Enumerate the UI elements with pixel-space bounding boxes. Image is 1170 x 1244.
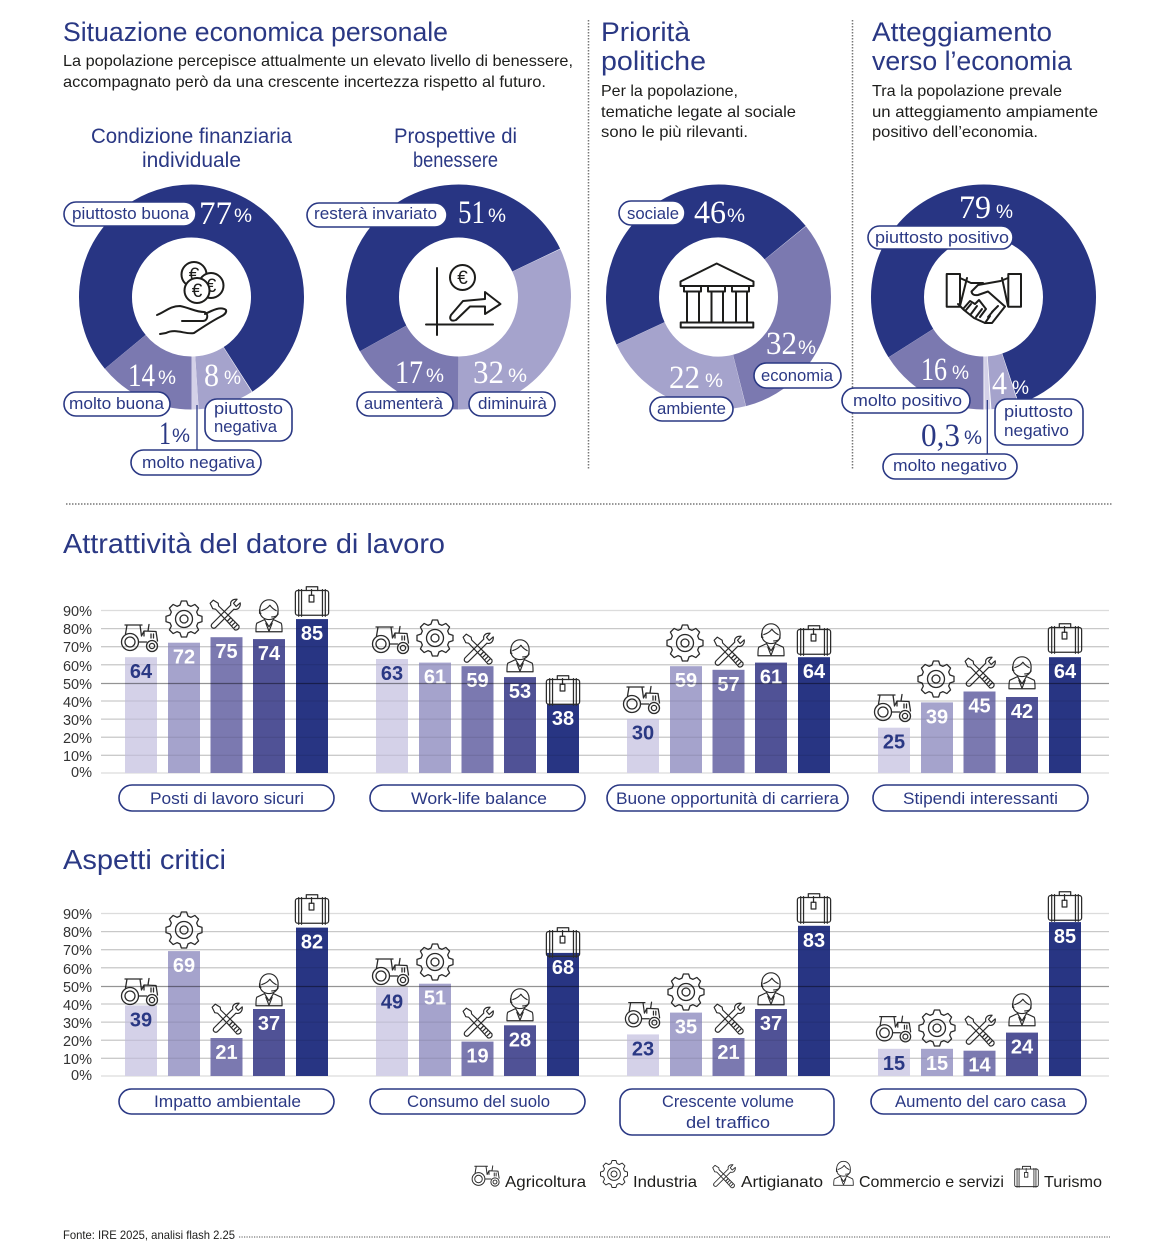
percent: 32	[766, 326, 816, 362]
percent: 17: %	[426, 366, 444, 387]
axis labels: 80%	[63, 925, 92, 941]
axis labels: 30%	[63, 713, 92, 729]
label: Consumo del suolo	[370, 1089, 585, 1114]
percent: 22: %	[705, 371, 723, 392]
bar: Industria 69: 69	[173, 955, 195, 977]
bar: Turismo 64	[1048, 624, 1082, 773]
legend item: Agricoltura	[472, 1166, 586, 1191]
axis labels	[63, 907, 92, 1084]
bar: Artigianato 59	[462, 633, 494, 773]
bar: Commercio e servizi 37	[755, 973, 787, 1076]
label: Impatto ambientale	[119, 1089, 334, 1114]
group: Buone opportunità di carriera	[624, 624, 831, 773]
bar: Commercio e servizi 61	[755, 624, 787, 773]
bar: Agricoltura 49: 49	[381, 991, 403, 1013]
bar: Turismo 82: 82	[301, 932, 323, 954]
text block: atteggiamento: un atteggiamento ampiamente	[872, 104, 1098, 121]
label: molto buona: molto buona	[69, 394, 165, 413]
legend item: Artigianato	[713, 1165, 823, 1191]
bar: Turismo 85	[1048, 892, 1082, 1076]
heading: Prospettive di benessere: benessere	[413, 148, 498, 172]
bar: Agricoltura 63: 63	[381, 663, 403, 685]
percent: 46: %	[727, 206, 745, 227]
label: Posti di lavoro sicuri: Posti di lavoro sicuri	[150, 789, 304, 808]
bar: Agricoltura 39: 39	[130, 1009, 152, 1031]
bar: Turismo 83	[797, 894, 831, 1076]
bar chart: Aspetti critici	[63, 892, 1109, 1135]
percent: 32: %	[508, 366, 527, 387]
text block: priorità: tematiche legate al sociale	[601, 104, 796, 121]
bar: Artigianato 14	[964, 1015, 996, 1077]
heading: Condizione finanziaria individuale: individuale	[142, 148, 241, 172]
bar: Commercio e servizi 24	[1006, 994, 1038, 1076]
label: ambiente: ambiente	[657, 399, 726, 418]
percent: 17: 17	[395, 355, 423, 391]
bar: Industria 39	[918, 661, 954, 773]
legend item: Turismo: Turismo	[1044, 1174, 1102, 1191]
percent: 4: %	[1012, 378, 1029, 399]
percent: 32: %	[798, 338, 816, 359]
label: Stipendi interessanti: Stipendi interessanti	[903, 789, 1058, 808]
percent: 8: 8	[204, 358, 219, 394]
bar: Industria 51: 51	[424, 988, 446, 1010]
bar: Commercio e servizi 74: 74	[258, 643, 281, 665]
percent: 46: 46	[694, 195, 726, 231]
percent: 79: %	[996, 202, 1013, 223]
percent: 22	[669, 360, 723, 396]
heading: Atteggiamento verso l'economia	[872, 17, 1073, 76]
percent: 51: 51	[458, 195, 485, 231]
bar: Artigianato 45: 45	[968, 696, 991, 718]
icon: hand with euro coins	[157, 262, 226, 334]
label: Aumento del caro casa: Aumento del caro casa	[895, 1092, 1067, 1111]
bar: Artigianato 21: 21	[215, 1042, 238, 1064]
percent: 1	[159, 416, 190, 452]
donut chart: Priorità politiche	[598, 176, 841, 421]
label: aumenterà: aumenterà	[364, 394, 444, 413]
heading: Atteggiamento verso l'economia: verso l’economia	[872, 46, 1073, 76]
bar: Commercio e servizi 74	[253, 600, 285, 773]
percent: 77: 77	[199, 196, 232, 232]
label: resterà invariato	[307, 203, 447, 227]
axis labels: 60%	[63, 962, 92, 978]
text block: atteggiamento	[872, 83, 1098, 141]
axis labels: 60%	[63, 659, 92, 675]
axis labels: 40%	[63, 998, 92, 1014]
axis labels: 20%	[63, 1034, 92, 1050]
bar: Commercio e servizi 37: 37	[760, 1013, 782, 1035]
legend item: Industria: Industria	[633, 1174, 697, 1191]
heading: Priorità politiche: Priorità	[601, 17, 691, 47]
percent: 1: %	[172, 426, 190, 447]
bar: Agricoltura 64	[122, 624, 158, 773]
bar: Artigianato 21: 21	[717, 1042, 740, 1064]
axis labels: 10%	[63, 1052, 92, 1068]
bar: Commercio e servizi 42: 42	[1011, 701, 1033, 723]
bar: Industria 59: 59	[675, 670, 697, 692]
label: Impatto ambientale: Impatto ambientale	[154, 1092, 301, 1111]
text block: intro benessere: La popolazione percepisce attualmente un elevato livello di benessere,	[63, 53, 573, 70]
label: resterà invariato: resterà invariato	[314, 204, 437, 223]
bar: Agricoltura 23	[625, 1002, 660, 1076]
percent: 1: 1	[159, 416, 171, 452]
donut chart: Prospettive di benessere	[307, 180, 575, 416]
label: Aumento del caro casa	[871, 1089, 1086, 1114]
text block: atteggiamento: positivo dell’economia.	[872, 124, 1038, 141]
heading: Atteggiamento verso l'economia: Atteggiamento	[872, 17, 1052, 47]
bar: Agricoltura 23: 23	[632, 1038, 654, 1060]
label: ambiente	[650, 397, 733, 421]
bar: Artigianato 19: 19	[466, 1046, 489, 1068]
label: molto positivo: molto positivo	[853, 391, 962, 410]
legend item: Artigianato: Artigianato	[741, 1174, 823, 1191]
axis labels: 10%	[63, 749, 92, 765]
heading: Prospettive di benessere: Prospettive di	[394, 124, 517, 148]
axis labels: 0%	[71, 765, 92, 781]
bar: Turismo 85: 85	[1054, 926, 1076, 948]
percent: 22: 22	[669, 360, 700, 396]
title: Aspetti critici: Aspetti critici	[63, 844, 226, 875]
bar: Agricoltura 63	[372, 626, 408, 773]
icon: hand with euro coins: €	[192, 281, 203, 302]
group: Crescente volume del traffico	[625, 894, 831, 1076]
icon: handshake	[947, 274, 1021, 323]
percent: 77	[199, 196, 252, 232]
text block: intro benessere: accompagnato però da una crescente incertezza rispetto al futuro.	[63, 74, 546, 91]
bar: Agricoltura 30: 30	[632, 723, 654, 745]
bar: Turismo 68	[546, 928, 580, 1076]
percent: 79: 79	[959, 190, 991, 226]
percent: 0,3: %	[964, 428, 982, 449]
label: molto negativo: molto negativo	[893, 456, 1007, 475]
axis labels: 50%	[63, 980, 92, 996]
label: molto buona	[64, 392, 170, 416]
legend item: Turismo	[1015, 1166, 1102, 1191]
axis labels: 90%	[63, 907, 92, 923]
icon: hand with euro coins: €	[189, 265, 200, 286]
percent: 32: 32	[473, 355, 504, 391]
text block: priorità: sono le più rilevanti.	[601, 124, 748, 141]
heading: Priorità politiche: politiche	[601, 46, 706, 76]
bar: Industria 15: 15	[926, 1053, 948, 1075]
bar chart: Attrattività del datore di lavoro	[63, 587, 1109, 811]
bar: Agricoltura 39	[122, 978, 158, 1076]
percent: 14: 14	[128, 358, 155, 394]
group: Aumento del caro casa	[876, 892, 1082, 1077]
label: Posti di lavoro sicuri	[119, 785, 334, 811]
label: Crescente volume del traffico	[620, 1089, 834, 1135]
bar: Industria 59	[667, 625, 703, 773]
label: aumenterà	[357, 392, 453, 416]
bar: Commercio e servizi 61: 61	[760, 667, 782, 689]
axis labels	[63, 604, 92, 781]
bar: Turismo 68: 68	[552, 957, 574, 979]
bar: Industria 69	[166, 912, 202, 1076]
label: diminuirà	[469, 392, 555, 416]
legend item: Industria	[600, 1160, 697, 1191]
bar: Artigianato 45	[964, 657, 996, 773]
bar: Industria 51	[417, 944, 453, 1076]
legend item: Commercio e servizi: Commercio e servizi	[859, 1174, 1004, 1191]
axis labels: 90%	[63, 604, 92, 620]
axis labels: 70%	[63, 943, 92, 959]
bar: Commercio e servizi 28	[504, 989, 536, 1076]
percent: 79	[959, 190, 1013, 226]
bar: Industria 72: 72	[173, 647, 195, 669]
icon: hand with euro coins: €	[206, 276, 217, 297]
group: Work-life balance	[372, 620, 580, 773]
percent: 8: %	[224, 368, 241, 389]
axis labels: 20%	[63, 731, 92, 747]
axis labels: 0%	[71, 1068, 92, 1084]
label: Consumo del suolo: Consumo del suolo	[407, 1092, 550, 1111]
bar: Artigianato 19	[462, 1007, 494, 1076]
bar: Agricoltura 64: 64	[130, 661, 153, 683]
bar: Turismo 64	[797, 626, 831, 773]
title: Situazione economica personale: Situazione economica personale	[63, 17, 448, 47]
source note: Fonte: IRE 2025, analisi flash 2.25	[63, 1228, 235, 1242]
legend item: Commercio e servizi	[834, 1161, 1004, 1191]
label: sociale	[619, 201, 685, 225]
percent: 32: 32	[766, 326, 797, 362]
axis labels: 80%	[63, 622, 92, 638]
donut chart: Atteggiamento verso l'economia	[842, 178, 1102, 479]
percent: 46	[694, 195, 745, 231]
bar: Industria 35	[668, 974, 704, 1076]
percent: 51: %	[488, 206, 506, 227]
percent: 16: 16	[921, 352, 947, 388]
label: piuttosto negativa: piuttosto	[214, 399, 283, 418]
bar: Artigianato 59: 59	[466, 670, 489, 692]
icon: chart with euro coin and arrow: €	[457, 268, 468, 289]
bar: Agricoltura 30	[624, 686, 660, 773]
label: piuttosto buona: piuttosto buona	[72, 204, 190, 223]
bar: Commercio e servizi 53: 53	[509, 681, 531, 703]
label: piuttosto negativo	[995, 399, 1083, 445]
bar: Artigianato 57	[712, 636, 744, 773]
label: economia	[754, 363, 841, 388]
bar: Commercio e servizi 37: 37	[258, 1013, 280, 1035]
axis labels: 70%	[63, 640, 92, 656]
label: molto positivo	[842, 388, 970, 413]
text block: atteggiamento: Tra la popolazione prevale	[872, 83, 1062, 100]
label: Work-life balance	[370, 785, 585, 811]
label: piuttosto negativo: piuttosto	[1004, 402, 1073, 421]
label: diminuirà: diminuirà	[478, 394, 548, 413]
bar: Commercio e servizi 37	[253, 974, 285, 1076]
percent: 16: %	[952, 363, 969, 384]
label: economia: economia	[761, 366, 834, 385]
bar: Turismo 64: 64	[1054, 661, 1077, 683]
bar: Industria 15	[919, 1010, 955, 1076]
bar: Industria 61: 61	[424, 667, 446, 689]
heading: Condizione finanziaria individuale	[91, 124, 292, 172]
label: piuttosto positivo: piuttosto positivo	[875, 228, 1009, 247]
donut chart: Condizione finanziaria individuale	[64, 176, 313, 475]
bar: Artigianato 21	[712, 1003, 744, 1076]
bar: Turismo 82	[295, 895, 329, 1076]
bar: Industria 72	[166, 601, 202, 773]
axis labels: 50%	[63, 677, 92, 693]
label: Work-life balance: Work-life balance	[411, 789, 547, 808]
icon: chart with euro coin and arrow	[426, 265, 500, 335]
bar: Agricoltura 15	[876, 1016, 911, 1076]
bar: Turismo 85	[295, 587, 329, 773]
label: molto negativa	[131, 450, 261, 475]
bar: Commercio e servizi 24: 24	[1011, 1037, 1034, 1059]
label: sociale: sociale	[627, 204, 679, 223]
bar: Agricoltura 25	[874, 694, 910, 773]
bar: Turismo 38	[546, 676, 580, 773]
label: piuttosto negativa: negativa	[214, 417, 278, 436]
bar: Agricoltura 49	[372, 958, 408, 1076]
label: piuttosto negativo: negativo	[1004, 421, 1069, 440]
icon: temple	[680, 264, 754, 328]
text block: intro benessere	[63, 53, 573, 91]
label: molto negativa: molto negativa	[142, 453, 256, 472]
bar: Industria 35: 35	[675, 1017, 697, 1039]
bar: Agricoltura 25: 25	[883, 732, 905, 754]
bar: Industria 61	[417, 620, 453, 773]
bar: Artigianato 75	[210, 599, 242, 773]
label: piuttosto negativa	[205, 399, 292, 441]
text block: priorità	[601, 83, 796, 141]
group: Impatto ambientale	[122, 895, 329, 1076]
percent: 51	[458, 195, 506, 231]
percent: 14: %	[158, 368, 176, 389]
bar: Agricoltura 15: 15	[883, 1053, 905, 1075]
percent: 0,3	[921, 418, 982, 454]
bar: Turismo 64: 64	[803, 661, 826, 683]
label: Crescente volume del traffico: Crescente volume	[662, 1092, 794, 1111]
percent: 32	[473, 355, 527, 391]
bar: Turismo 85: 85	[301, 623, 323, 645]
percent: 0,3: 0,3	[921, 418, 960, 454]
bar: Commercio e servizi 28: 28	[509, 1029, 531, 1051]
percent: 14	[128, 358, 176, 394]
percent: 8	[204, 358, 241, 394]
bar: Industria 39: 39	[926, 706, 948, 728]
percent: 16	[921, 352, 969, 388]
bar: Commercio e servizi 42	[1006, 657, 1038, 773]
legend	[472, 1160, 1102, 1191]
heading: Prospettive di benessere	[394, 124, 517, 172]
bar: Artigianato 75: 75	[215, 641, 238, 663]
label: Crescente volume del traffico: del traffico	[686, 1113, 770, 1132]
heading: Priorità politiche	[601, 17, 706, 76]
group: Consumo del suolo	[372, 928, 580, 1076]
title: Attrattività del datore di lavoro: Attrattività del datore di lavoro	[63, 528, 445, 559]
percent: 77: %	[234, 206, 252, 227]
label: Buone opportunità di carriera	[607, 785, 848, 811]
label: piuttosto buona	[64, 202, 196, 226]
bar: Artigianato 14: 14	[968, 1055, 991, 1077]
axis labels: 40%	[63, 695, 92, 711]
bar: Artigianato 57: 57	[717, 674, 740, 696]
axis labels: 30%	[63, 1016, 92, 1032]
group: Posti di lavoro sicuri	[122, 587, 329, 773]
bar: Turismo 83: 83	[803, 930, 825, 952]
percent: 17	[395, 355, 444, 391]
heading: Condizione finanziaria individuale: Condizione finanziaria	[91, 124, 292, 148]
bar: Artigianato 21	[210, 1003, 242, 1076]
text block: priorità: Per la popolazione,	[601, 83, 738, 100]
bar: Turismo 38: 38	[552, 708, 574, 730]
percent: 4: 4	[992, 366, 1007, 402]
group: Stipendi interessanti	[874, 624, 1082, 773]
label: Buone opportunità di carriera: Buone opportunità di carriera	[616, 789, 840, 808]
legend item: Agricoltura: Agricoltura	[505, 1174, 586, 1191]
bar: Commercio e servizi 53	[504, 640, 536, 773]
label: molto negativo	[883, 454, 1017, 479]
percent: 4	[992, 366, 1029, 402]
label: Stipendi interessanti	[873, 785, 1088, 811]
